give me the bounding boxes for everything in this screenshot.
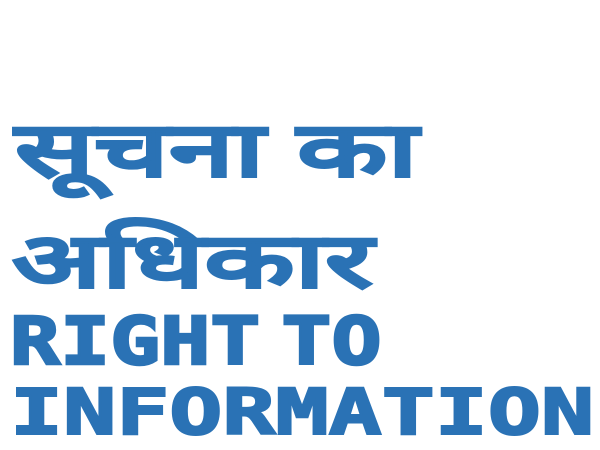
title: English line 1: RIGHT TO bbox=[10, 303, 382, 380]
title: Hindi line 2: अधिकार bbox=[12, 219, 373, 304]
title: Hindi line 1: सूचना का bbox=[15, 108, 418, 193]
title: English line 2: INFORMATION bbox=[10, 376, 594, 449]
